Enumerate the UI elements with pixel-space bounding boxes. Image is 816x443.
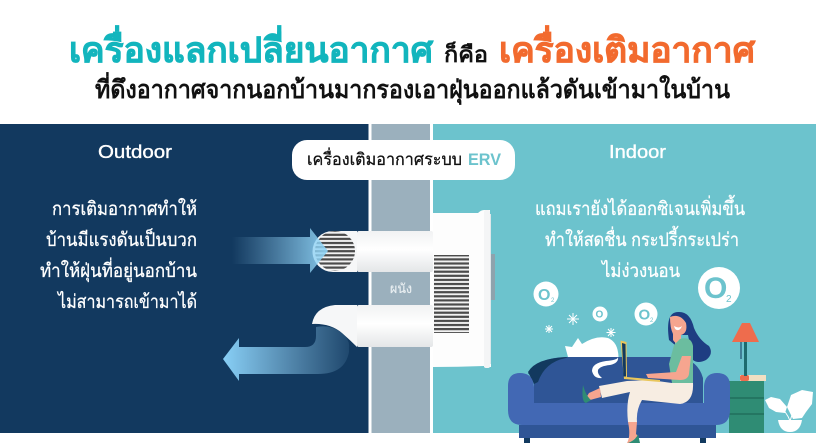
outdoor text: ทำให้ฝุ่นที่อยู่นอกบ้าน bbox=[40, 257, 197, 283]
oxygen bubbles: 2 bbox=[551, 298, 555, 304]
nightstand bbox=[729, 375, 766, 433]
hair bbox=[668, 312, 711, 362]
trousers bbox=[599, 380, 693, 422]
oxygen bubbles bbox=[534, 267, 740, 326]
title bbox=[69, 25, 756, 70]
potted plant bbox=[765, 390, 813, 432]
outdoor heading: Outdoor bbox=[98, 142, 172, 162]
oxygen bubbles: O bbox=[596, 310, 604, 320]
oxygen bubbles: O bbox=[538, 287, 550, 304]
panel: wall bbox=[372, 124, 430, 433]
dust sparkles bbox=[545, 313, 616, 337]
oxygen bubbles: O bbox=[638, 306, 650, 324]
label pill: เครื่องเติมอากาศระบบ bbox=[307, 147, 462, 169]
outdoor text: ไม่สามารถเข้ามาได้ bbox=[56, 291, 197, 313]
cat bbox=[565, 337, 618, 378]
outdoor text: การเติมอากาศทำให้ bbox=[52, 198, 197, 220]
ERV unit bbox=[433, 210, 495, 368]
arrow: air out bbox=[223, 326, 349, 381]
wall label: ผนัง bbox=[390, 281, 412, 296]
unit grille bbox=[434, 255, 469, 333]
panel: outdoor bbox=[0, 124, 368, 433]
woman bbox=[582, 312, 711, 443]
title: เครื่องเติมอากาศ bbox=[499, 25, 756, 70]
title: ก็คือ bbox=[444, 40, 488, 67]
label pill: ERV bbox=[468, 150, 502, 169]
feet bbox=[586, 388, 601, 400]
sofa bbox=[508, 357, 730, 443]
title: เครื่องแลกเปลี่ยนอากาศ bbox=[69, 25, 434, 70]
indoor text: ไม่ง่วงนอน bbox=[600, 260, 680, 282]
label pill bbox=[292, 140, 515, 180]
panel: indoor bbox=[433, 124, 816, 433]
indoor text bbox=[535, 195, 745, 282]
intake duct bbox=[312, 231, 433, 272]
indoor heading: Indoor bbox=[609, 142, 666, 162]
indoor text: แถมเรายังได้ออกซิเจนเพิ่มขึ้น bbox=[535, 195, 745, 220]
oxygen bubbles: 2 bbox=[650, 318, 654, 324]
arrow: air in bbox=[232, 228, 328, 273]
laptop bbox=[620, 340, 660, 382]
face bbox=[670, 316, 686, 344]
subtitle: ที่ดึงอากาศจากนอกบ้านมากรองเอาฝุ่นออกแล้วดันเข้ามาในบ้าน bbox=[95, 72, 730, 106]
oxygen bubbles: 2 bbox=[726, 294, 732, 305]
exhaust duct bbox=[312, 305, 433, 347]
oxygen bubbles: O bbox=[704, 272, 727, 305]
outdoor text: บ้านมีแรงดันเป็นบวก bbox=[46, 227, 197, 251]
indoor text: ทำให้สดชื่น กระปรี้กระเปร่า bbox=[545, 226, 739, 251]
shirt bbox=[669, 338, 693, 383]
lamp bbox=[732, 323, 759, 376]
outdoor text bbox=[40, 198, 197, 313]
arm bbox=[646, 356, 691, 380]
